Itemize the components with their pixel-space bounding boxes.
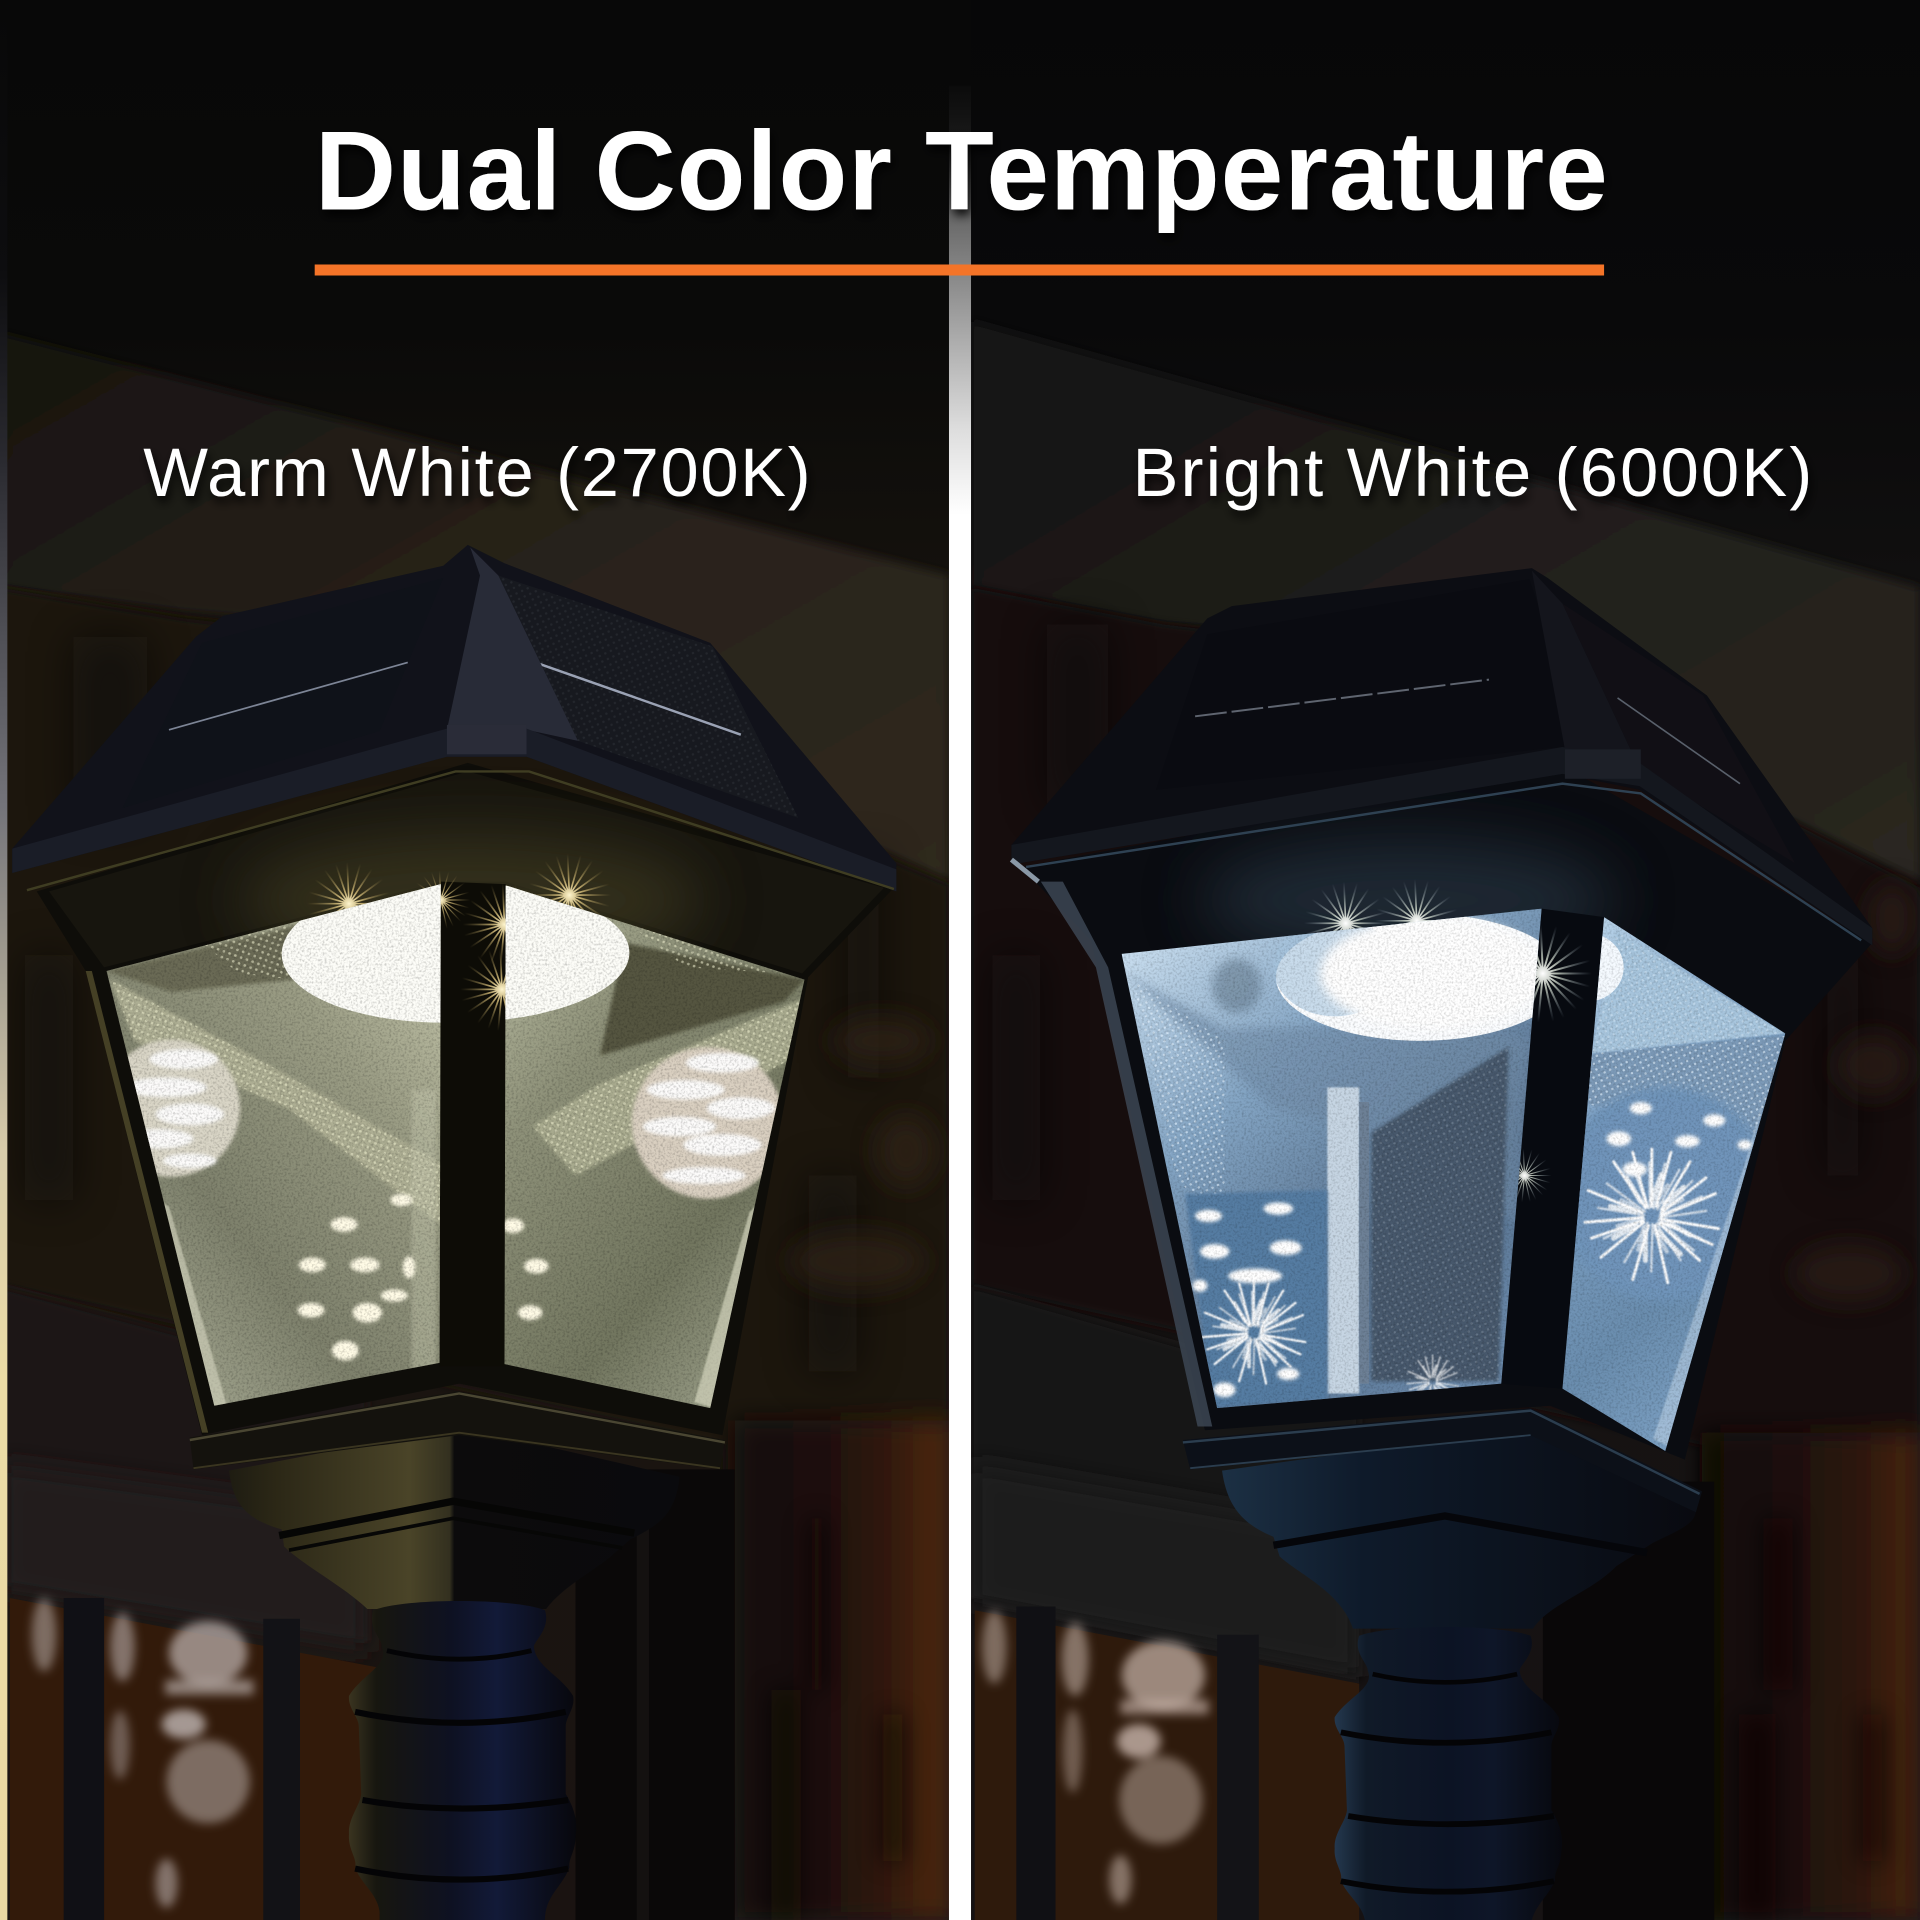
post column bbox=[1335, 1627, 1562, 1920]
lantern body frame bbox=[1021, 765, 1872, 1460]
wall band behind lantern bbox=[971, 321, 1920, 882]
title: Dual Color Temperature bbox=[315, 107, 1608, 233]
panel: bright white background scene bbox=[971, 326, 1920, 1920]
centre post bbox=[1501, 909, 1604, 1389]
wall band behind lantern bbox=[0, 333, 949, 882]
title underline bbox=[315, 264, 1604, 276]
left solar panel bbox=[122, 578, 443, 808]
window with reflections bbox=[975, 1607, 1359, 1920]
lamp disc bbox=[279, 869, 632, 1028]
panel: warm white background scene bbox=[0, 275, 949, 1920]
left side trim highlight bbox=[86, 971, 208, 1433]
roof rib bbox=[1532, 571, 1640, 769]
light starbursts bbox=[1298, 873, 1599, 1206]
right solar panel bbox=[1562, 604, 1795, 863]
right bright glass edge bbox=[694, 1194, 767, 1408]
left edge strip bbox=[0, 280, 8, 1920]
lantern: bright white bbox=[1011, 568, 1872, 1920]
side lamp bbox=[103, 1040, 240, 1177]
inner reflector mesh bbox=[1124, 973, 1531, 1224]
lantern base and neck bbox=[1183, 1408, 1702, 1629]
lamp disc bbox=[282, 883, 629, 1022]
post column bbox=[349, 1601, 576, 1920]
right glass pane bbox=[1550, 912, 1794, 1457]
left solar panel bbox=[1156, 579, 1584, 790]
stone wall bbox=[0, 588, 949, 1920]
left glass pane bbox=[1114, 900, 1565, 1414]
lower leds bbox=[502, 1218, 549, 1320]
solar roof bbox=[12, 545, 896, 891]
centre post bbox=[440, 882, 506, 1367]
upper frieze glow bbox=[49, 771, 884, 973]
right solar panel bbox=[498, 576, 798, 818]
lamp disc bbox=[1276, 913, 1565, 1041]
label: warm white: Warm White (2700K) bbox=[143, 434, 811, 511]
right glass pane bbox=[282, 876, 814, 1414]
window with reflections bbox=[10, 1598, 380, 1920]
porch ceiling bbox=[975, 1291, 980, 1292]
eave trim bbox=[12, 729, 896, 891]
lantern: warm white bbox=[12, 545, 896, 1920]
inner reflector mesh bbox=[107, 884, 441, 992]
solar roof bbox=[1011, 568, 1872, 945]
left glass pane bbox=[106, 884, 441, 1406]
label: bright white: Bright White (6000K) bbox=[1133, 434, 1812, 511]
lantern base and neck bbox=[190, 1391, 725, 1609]
frieze glow bbox=[1200, 839, 1616, 961]
light starbursts bbox=[301, 847, 617, 1037]
vertical inner edge bbox=[411, 1090, 436, 1371]
lower leds bbox=[298, 1194, 415, 1360]
lantern body frame bbox=[37, 763, 896, 1435]
stone wall bbox=[971, 588, 1920, 1920]
roof centre rib bbox=[447, 547, 578, 741]
eave trim bbox=[1011, 747, 1872, 945]
vertical interior post bbox=[1327, 1087, 1359, 1393]
porch ceiling bbox=[8, 1292, 64, 1306]
divider bar bbox=[949, 86, 971, 1920]
left bright glass edge bbox=[157, 1200, 228, 1408]
led board bbox=[1185, 1190, 1327, 1408]
side lamp bbox=[632, 1047, 784, 1199]
left side trim highlight bbox=[1041, 882, 1212, 1427]
